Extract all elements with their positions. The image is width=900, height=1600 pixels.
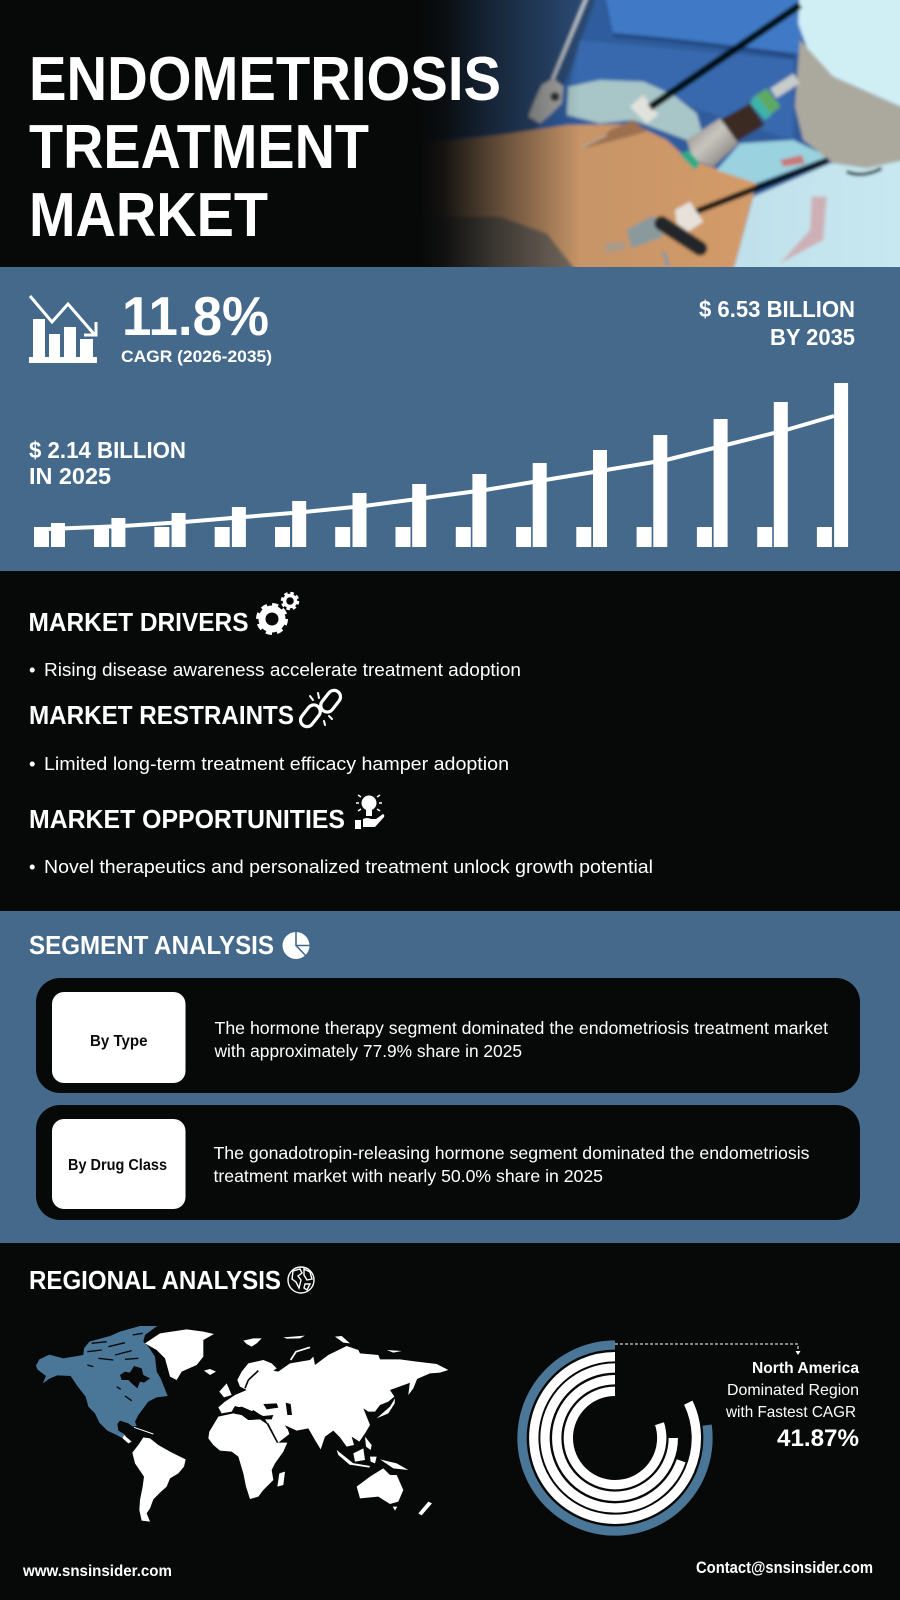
arrow: dashed callout line — [615, 1344, 800, 1355]
heading: market restraints: MARKET RESTRAINTS — [29, 700, 294, 730]
panel: market dynamics — [28, 593, 653, 877]
label: by drug class: By Drug Class — [68, 1157, 167, 1174]
2035 value: $ 6.53 BILLION — [699, 296, 855, 322]
callout: north america: Dominated Region — [727, 1382, 859, 1399]
description: by type: with approximately 77.9% share in 2025 — [214, 1041, 522, 1061]
description: by type: The hormone therapy segment dominated the endometriosis treatment market — [214, 1018, 828, 1038]
callout: north america: North America — [752, 1360, 859, 1377]
footer: website: www.snsinsider.com — [22, 1563, 172, 1580]
description: by drug class: The gonadotropin-releasing hormone segment dominated the endometriosis — [214, 1143, 810, 1163]
callout: north america: 41.87% — [777, 1425, 859, 1452]
title — [29, 45, 501, 250]
title: ENDOMETRIOSIS — [29, 45, 501, 114]
label box: by type — [52, 992, 186, 1083]
photo: laparoscopic surgery — [434, 0, 900, 267]
heading: market opportunities: MARKET OPPORTUNITIES — [29, 804, 345, 834]
radial chart — [522, 1345, 708, 1531]
bar chart with growth line — [34, 383, 848, 547]
icon: broken chain — [298, 688, 343, 729]
title: TREATMENT — [29, 113, 369, 182]
icon: gears — [258, 593, 298, 633]
heading: segment analysis: SEGMENT ANALYSIS — [29, 930, 274, 960]
panel: regional analysis — [29, 1265, 859, 1531]
world map — [36, 1326, 448, 1522]
label box: by drug class — [52, 1119, 186, 1209]
2025 value — [29, 437, 186, 489]
opportunity text: Novel therapeutics and personalized treatment unlock growth potential — [44, 856, 653, 877]
icon: globe — [288, 1267, 314, 1293]
CAGR value: 11.8% — [122, 285, 269, 347]
restraint text: Limited long-term treatment efficacy hamper adoption — [44, 753, 509, 774]
opportunity text: • — [29, 856, 35, 877]
driver text: • — [29, 659, 35, 680]
panel: segment analysis — [0, 911, 900, 1243]
2025 value: $ 2.14 BILLION — [29, 437, 186, 463]
card: by drug class — [36, 1105, 860, 1220]
region: north america — [36, 1326, 168, 1439]
label: by type: By Type — [90, 1033, 148, 1050]
2035 value: BY 2035 — [770, 324, 855, 350]
callout: north america — [725, 1360, 859, 1452]
2025 value: IN 2025 — [29, 463, 111, 489]
CAGR label: CAGR (2026-2035) — [121, 347, 272, 366]
icon: hand with light bulb — [355, 795, 384, 829]
icon: pie chart — [282, 932, 310, 959]
description: by type — [214, 1018, 828, 1061]
footer: contact: Contact@snsinsider.com — [696, 1559, 873, 1577]
card: by type — [36, 978, 860, 1093]
region: rest of world — [123, 1329, 448, 1522]
icon: chart with trend arrow — [29, 296, 97, 363]
heading: market drivers: MARKET DRIVERS — [28, 607, 248, 637]
heading: regional analysis: REGIONAL ANALYSIS — [29, 1265, 281, 1295]
panel: market size — [0, 267, 900, 571]
driver text: Rising disease awareness accelerate treatment adoption — [44, 659, 521, 680]
2035 value — [699, 296, 855, 350]
title: MARKET — [29, 181, 268, 250]
callout: north america: with Fastest CAGR — [725, 1404, 856, 1421]
restraint text: • — [29, 753, 35, 774]
description: by drug class: treatment market with nearly 50.0% share in 2025 — [214, 1166, 603, 1186]
description: by drug class — [214, 1143, 810, 1186]
